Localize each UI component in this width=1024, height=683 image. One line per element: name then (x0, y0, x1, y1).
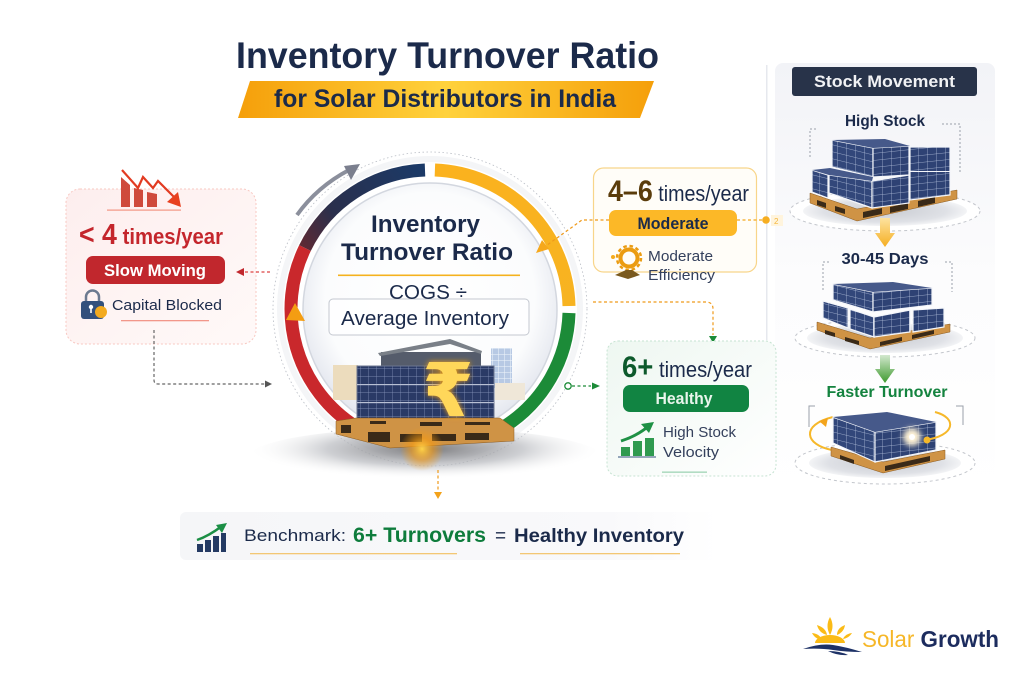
healthy note (663, 424, 736, 461)
pallet of panels with rupee: ₹ (422, 348, 474, 434)
benchmark text: Benchmark: (244, 526, 346, 545)
healthy pill (623, 385, 749, 412)
stock movement heading (792, 67, 977, 96)
faster turnover label: Faster Turnover (826, 384, 948, 401)
arrow: orange marker (286, 303, 305, 321)
central ratio circle (247, 152, 603, 488)
high stock label: High Stock (845, 113, 925, 130)
title: Inventory Turnover Ratio (236, 35, 659, 76)
connector: ring to healthy (593, 302, 717, 343)
benchmark text (244, 524, 684, 547)
pallet of panels with rupee: ₹ (422, 348, 474, 434)
icon: falling bar chart (107, 170, 181, 211)
warehouse (333, 339, 525, 400)
fast stock pallet (795, 412, 975, 484)
panel: slow moving (66, 170, 256, 344)
benchmark text: = (495, 526, 506, 547)
formula: COGS ÷ (389, 282, 467, 304)
icon: padlock (81, 291, 107, 319)
formula (329, 282, 529, 335)
mid stock pallet (795, 282, 975, 357)
icon: benchmark chart (197, 523, 227, 552)
ratio heading: Inventory (371, 211, 481, 238)
ring segment: slow (291, 248, 356, 427)
panel: stock movement (766, 63, 995, 493)
icon: rising chart (618, 422, 656, 458)
connector: ratio to slow moving (236, 268, 270, 276)
capital blocked note: Capital Blocked (112, 297, 222, 314)
moderate note: Efficiency (648, 267, 716, 284)
panel: healthy (607, 341, 776, 476)
logo (803, 617, 999, 655)
benchmark text: 6+ Turnovers (353, 524, 486, 547)
panel: moderate (594, 168, 756, 284)
slow moving pill (86, 256, 225, 284)
healthy rate: 6+ times/year (622, 351, 752, 384)
moderate pill (609, 210, 737, 236)
icon: sun (803, 617, 862, 655)
healthy pill: Healthy (656, 389, 713, 408)
benchmark text: Healthy Inventory (514, 525, 684, 547)
connector: ratio to benchmark (434, 470, 442, 499)
healthy note: Velocity (663, 444, 720, 461)
high stock pallet (790, 139, 980, 231)
moderate pill: Moderate (638, 214, 708, 233)
connector: ring to healthy card (565, 382, 600, 390)
ring segment: navy (305, 170, 425, 248)
moderate note (648, 248, 716, 284)
arrow: cycle (297, 164, 360, 215)
benchmark bar (180, 512, 717, 560)
pallet of panels with rupee (336, 348, 514, 471)
moderate note: Moderate (648, 248, 713, 265)
healthy note: High Stock (663, 424, 736, 441)
arrow: down green (875, 355, 895, 383)
formula: Average Inventory (341, 308, 509, 330)
stock movement heading: Stock Movement (814, 72, 955, 91)
logo wordmark: Solar Growth (862, 626, 999, 652)
slow moving pill: Slow Moving (104, 261, 206, 280)
moderate rate: 4–6 times/year (608, 175, 749, 208)
ratio heading: Turnover Ratio (341, 239, 513, 266)
connector: moderate to ring (536, 220, 609, 253)
arrow: down yellow (875, 218, 895, 247)
subtitle banner (238, 81, 654, 118)
icon: gear (611, 246, 641, 279)
ring segment: healthy (504, 313, 569, 427)
connector: moderate to stock movement: 2 (774, 217, 779, 226)
slow moving rate: < 4 times/year (79, 219, 223, 251)
ring segment: moderate (435, 170, 569, 306)
days label: 30-45 Days (842, 251, 928, 268)
reflective floor (247, 428, 603, 488)
subtitle banner: for Solar Distributors in India (274, 85, 617, 113)
connector: slow moving to ratio (154, 330, 272, 388)
ratio heading (341, 211, 513, 266)
connector: moderate to stock movement (737, 215, 783, 226)
